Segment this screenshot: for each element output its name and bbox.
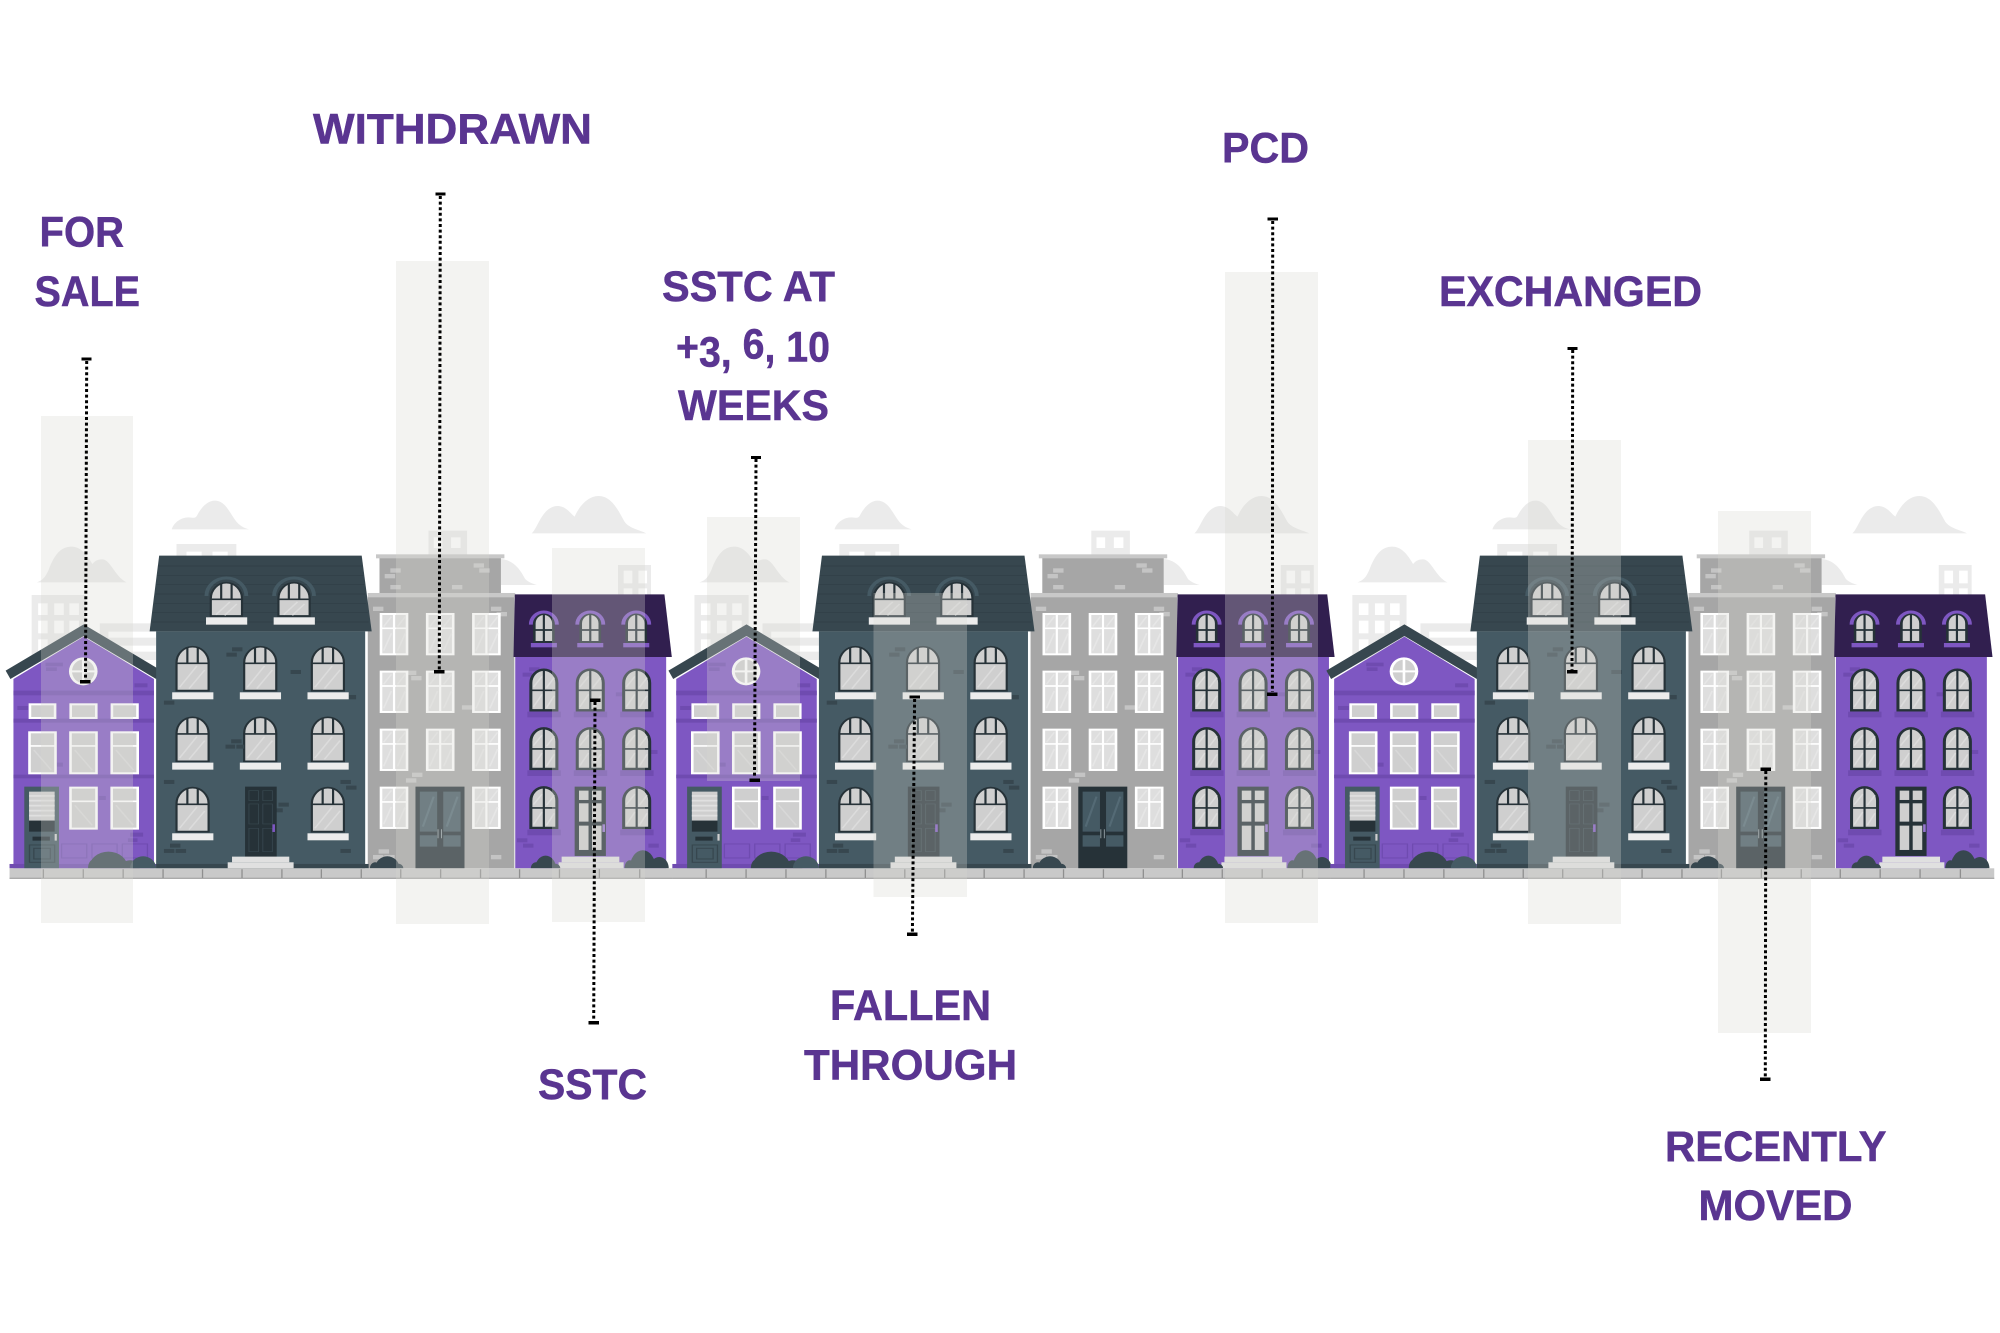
label: sstc at +3, 6, 10 weeks: WEEKS: [678, 382, 829, 430]
house: purple gabled: [668, 624, 824, 868]
leader: exchanged: [1570, 350, 1574, 670]
house: purple gabled: [1326, 624, 1482, 868]
house: grey: [368, 554, 515, 868]
column: for sale: [41, 416, 133, 923]
column: sstc: [552, 548, 645, 922]
label: recently moved: RECENTLY: [1665, 1123, 1886, 1171]
column: recently moved: [1718, 511, 1811, 1033]
label: recently moved: [1665, 1123, 1886, 1230]
pavement: [672, 868, 1336, 879]
label: sstc: SSTC: [538, 1061, 647, 1109]
house: dark slate: [1470, 556, 1692, 868]
dotted leader lines: [86, 196, 1766, 1077]
pavement: [10, 868, 674, 879]
column: fallen through: [874, 593, 967, 897]
leader: withdrawn: [439, 196, 440, 670]
label: fallen through: [804, 982, 1017, 1089]
label: sstc at +3, 6, 10 weeks: +: [676, 324, 701, 372]
street block 1: [6, 554, 674, 879]
leader: sstc: [594, 702, 595, 1021]
column: sstc at weeks: [707, 517, 800, 781]
house: grey: [1688, 554, 1836, 868]
leader: recently moved: [1764, 771, 1767, 1077]
label: withdrawn: WITHDRAWN: [313, 105, 592, 153]
background skyline: clouds and distant buildings: [32, 496, 1972, 662]
label: for sale: [34, 209, 140, 316]
label: fallen through: THROUGH: [804, 1041, 1017, 1089]
label: sstc at +3, 6, 10 weeks: 3,: [699, 329, 732, 377]
house: purple mansard: [514, 594, 672, 868]
label: fallen through: FALLEN: [830, 982, 991, 1030]
leader end caps: [80, 192, 1771, 1081]
street block 3: [1326, 554, 1994, 879]
house: purple mansard: [1176, 594, 1335, 868]
label: for sale: FOR: [40, 209, 124, 257]
leader: pcd: [1271, 221, 1274, 692]
label: pcd: PCD: [1222, 124, 1309, 172]
house: purple mansard: [1834, 594, 1993, 868]
pavement: [1330, 868, 1994, 879]
house: purple gabled: [6, 624, 161, 868]
leader: sstc at weeks: [754, 459, 756, 778]
leader: fallen through: [912, 699, 915, 932]
column: exchanged: [1528, 440, 1621, 924]
label: for sale: SALE: [34, 268, 140, 316]
label: exchanged: EXCHANGED: [1439, 268, 1702, 316]
leader: for sale: [86, 361, 87, 680]
house: dark slate: [812, 556, 1034, 868]
column: withdrawn: [396, 261, 489, 924]
house: dark slate: [150, 556, 372, 868]
column: pcd: [1225, 272, 1318, 923]
translucent highlight columns: [41, 261, 1811, 1033]
label: recently moved: MOVED: [1698, 1182, 1852, 1230]
label: sstc at +3, 6, 10 weeks: SSTC AT: [662, 263, 835, 311]
house: grey: [1031, 554, 1178, 868]
label: sstc at +3, 6, 10 weeks: 6: [743, 321, 764, 369]
label: sstc at +3, 6, 10 weeks: , 10: [764, 324, 830, 372]
label: sstc at +3, 6, 10 weeks: [662, 263, 835, 430]
street block 2: [668, 554, 1336, 879]
